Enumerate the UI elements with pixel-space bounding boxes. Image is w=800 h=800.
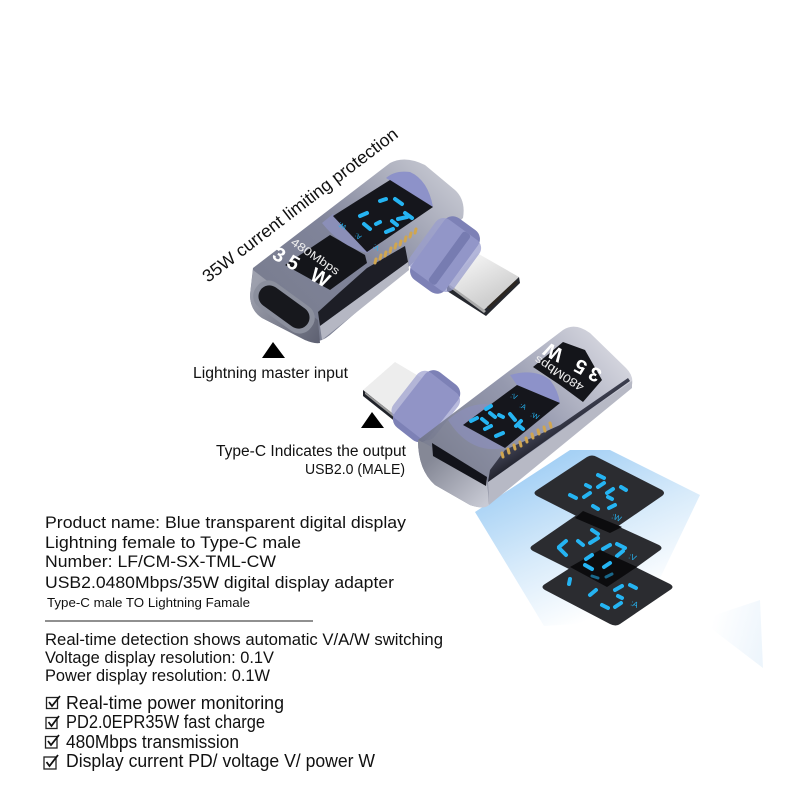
lower adapter display: :V [509, 392, 518, 402]
feature: fast charge: PD2.0EPR35W fast charge [66, 712, 265, 732]
upper adapter black band with 35 W: 480Mbps [288, 237, 342, 278]
text block: product specification: USB2.0480Mbps/35W digital display adapter [45, 573, 394, 592]
display layer: V reading [530, 511, 662, 586]
lower adapter display: :A [518, 402, 527, 412]
lower adapter black band with 35 W: 480Mbps [532, 353, 587, 393]
upper adapter barrel [401, 208, 489, 302]
text block: product specification: Lightning female to Type-C male [45, 533, 301, 552]
text block: display details: Power display resolution: 0.1W [45, 666, 270, 685]
text block: product specification [45, 513, 407, 610]
display layer: A reading: :A [629, 599, 640, 610]
upper adapter end face [250, 270, 320, 343]
label: Type-C output: USB2.0 (MALE) [305, 461, 405, 478]
lower adapter black band with 35 W [532, 337, 605, 402]
product: upper adapter with Lightning input [248, 159, 520, 343]
label: Type-C output [216, 443, 407, 478]
upper adapter black band with 35 W [269, 235, 367, 292]
display layer: W reading: :W [610, 512, 623, 524]
lower adapter end side [418, 440, 489, 508]
text block: product specification: Product name: Blue transparent digital display [45, 513, 407, 532]
feature checklist [44, 693, 375, 771]
lower adapter black cap [432, 443, 487, 486]
rotated heading: 35W current limiting protection: 35W current limiting protection [198, 124, 402, 286]
text block: display details: Real-time detection shows automatic V/A/W switching [45, 630, 443, 649]
upper adapter Lightning port [248, 275, 320, 339]
label: Type-C output: Type-C Indicates the output [216, 443, 407, 460]
upper adapter gold contact row [375, 229, 416, 263]
lower adapter black band with 35 W: 35 W [540, 337, 605, 386]
feature: transmission: 480Mbps transmission [66, 732, 239, 752]
text block: product specification: Number: LF/CM-SX-TML-CW [45, 552, 276, 571]
upper adapter display [322, 172, 433, 253]
upper adapter black band with 35 W: 35 W [269, 243, 334, 292]
text block: product specification: Type-C male TO Lightning Famale [47, 596, 250, 610]
lower adapter display: :W [529, 411, 540, 422]
lower adapter display [463, 372, 560, 448]
lower adapter gold contact row [502, 423, 551, 457]
upper adapter dark lower side [318, 246, 408, 326]
product: lower adapter with Type-C output [363, 327, 632, 508]
feature: display readings: Display current PD/ voltage V/ power W [66, 751, 375, 771]
icon: arrow to Lightning input [262, 342, 285, 358]
display layer: W reading [534, 456, 664, 531]
feature: real-time power monitoring: Real-time power monitoring [66, 693, 284, 713]
upper adapter display: A: [354, 231, 363, 240]
exploded display layers [530, 456, 672, 626]
lower adapter barrel [384, 362, 468, 449]
upper adapter Type-C plug [447, 253, 520, 316]
upper adapter display: V: [372, 242, 381, 251]
light beam [475, 450, 763, 668]
display layer: V reading: :V [627, 552, 638, 563]
lower adapter body [418, 327, 632, 507]
label: Lightning master input: Lightning master input [193, 365, 349, 382]
upper adapter body [250, 159, 464, 342]
text block: display details [45, 630, 443, 685]
lower adapter Type-C plug [363, 362, 432, 423]
text block: display details: Voltage display resolution: 0.1V [45, 648, 275, 667]
upper adapter display: W: [337, 220, 348, 230]
icon: arrow to Type-C output [361, 412, 384, 428]
display layer: A reading [542, 550, 672, 626]
